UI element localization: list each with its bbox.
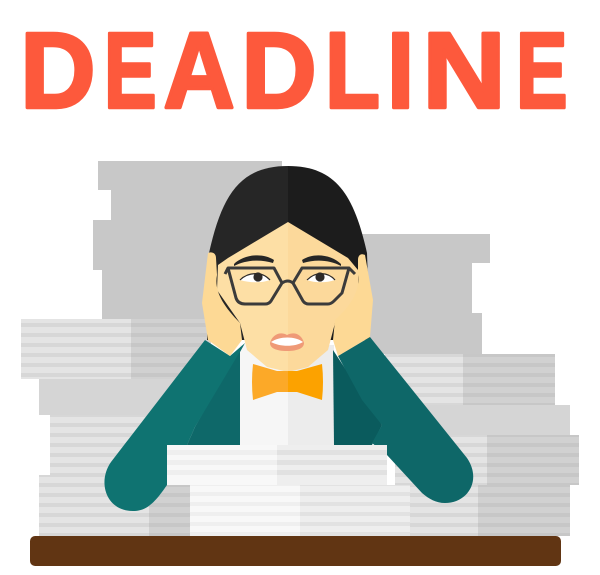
face (217, 222, 358, 372)
right hand (333, 254, 373, 356)
front paper stack (167, 445, 410, 536)
eyes (240, 272, 335, 282)
title (20, 9, 568, 131)
title: D (241, 11, 317, 131)
back paper stack: right pile (340, 234, 579, 536)
title: E (104, 10, 157, 131)
hair (207, 166, 370, 340)
glasses (225, 268, 355, 304)
back paper stack: tall centre pile (93, 161, 282, 319)
title: A (164, 9, 235, 130)
desk (30, 536, 561, 566)
title: E (516, 10, 568, 130)
title: N (422, 10, 506, 130)
title: D (20, 11, 96, 131)
eyebrows (234, 255, 341, 266)
person (104, 166, 473, 511)
shirt (240, 345, 334, 447)
right arm (338, 337, 473, 503)
title: I (387, 10, 414, 130)
left arm (104, 340, 245, 511)
bow tie (252, 364, 323, 400)
jacket body (187, 343, 382, 445)
left hand (202, 252, 242, 356)
back paper stack: left pile (21, 319, 211, 536)
mouth (270, 333, 304, 351)
title: L (325, 11, 380, 131)
